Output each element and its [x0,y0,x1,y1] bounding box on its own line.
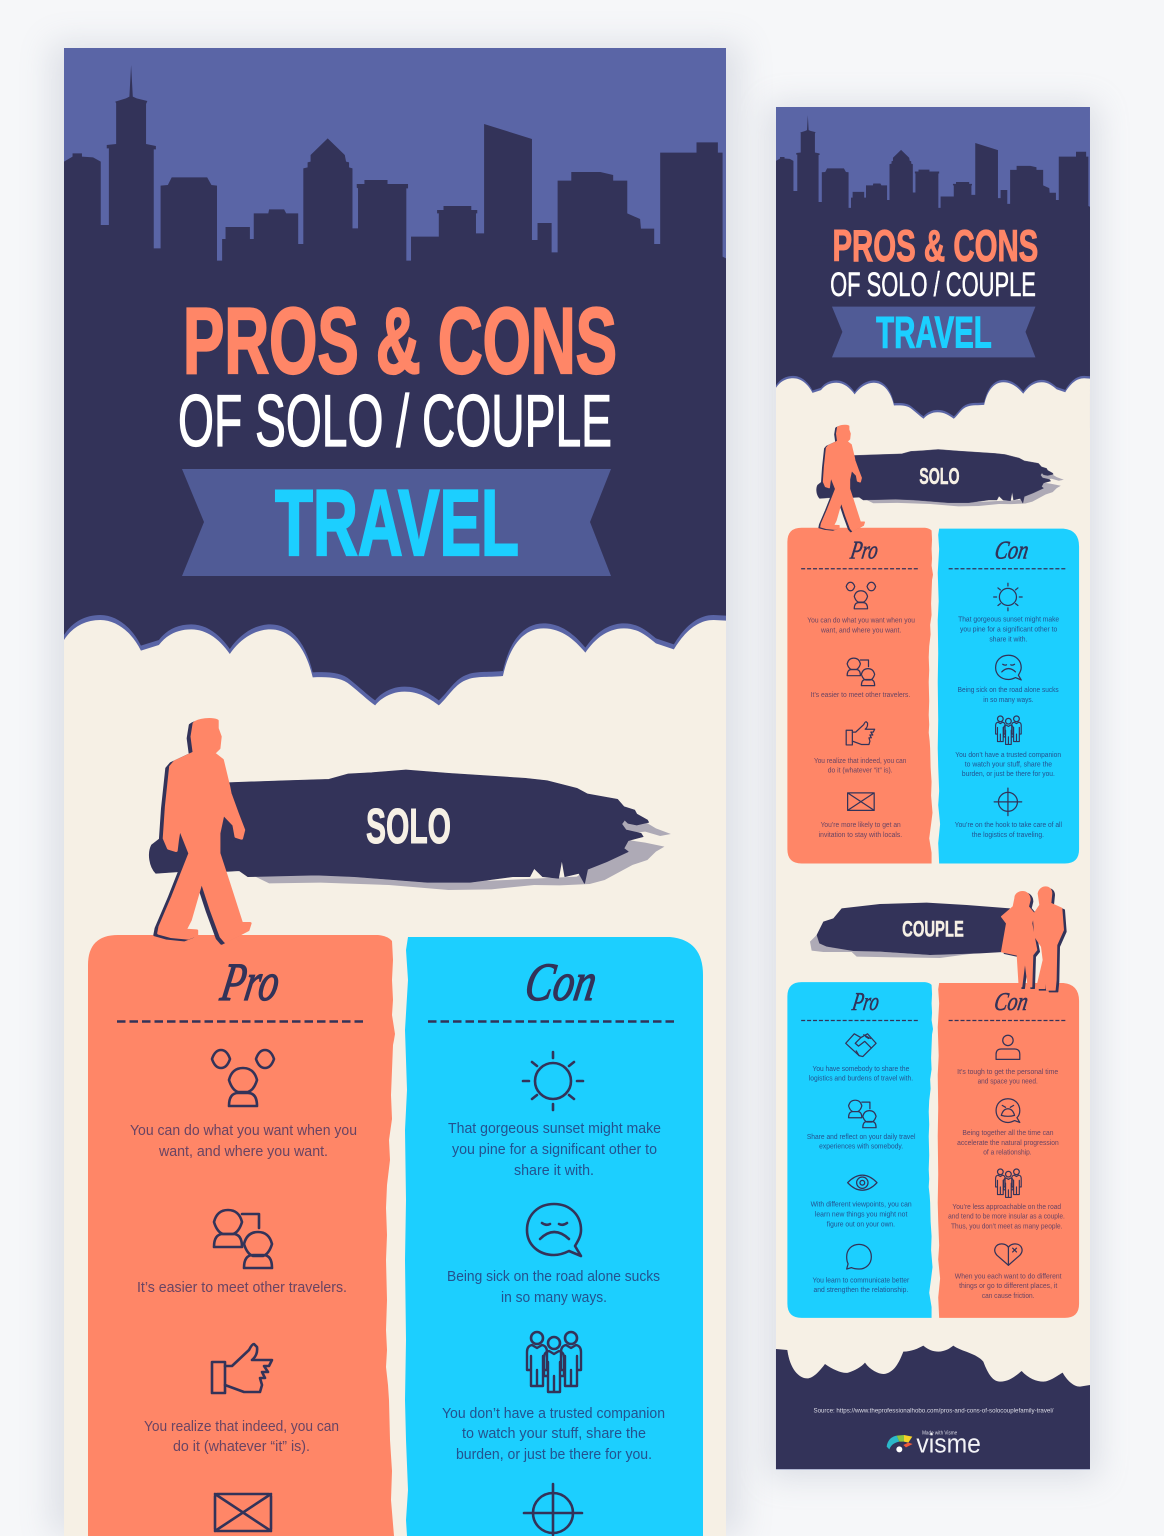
panel: couple pro: With different viewpoints, you can [811,1200,912,1208]
panel: couple pro [787,982,933,1318]
panel: solo con: You don’t have a trusted companion [442,1405,665,1422]
panel: solo pro: You’re more likely to get an [821,821,901,829]
panel: couple con: Thus, you don’t meet as many people. [951,1223,1062,1231]
panel: solo con: That gorgeous sunset might make [448,1120,661,1137]
panel: solo pro: do it (whatever “it” is). [828,766,893,774]
footer [776,1346,1090,1469]
panel: solo con: share it with. [514,1162,594,1179]
panel: couple pro: figure out on your own. [827,1220,895,1228]
panel: solo pro: do it (whatever “it” is). [173,1438,310,1455]
panel: couple con [938,983,1079,1318]
solo brush stroke and walking man: SOLO [919,463,960,489]
panel: solo pro: It’s easier to meet other travelers. [137,1279,347,1296]
panel: solo con: you pine for a significant other to [960,626,1057,634]
panel: solo con: Con [521,952,601,1012]
panel: solo pro: It’s easier to meet other travelers. [811,691,910,699]
panel: couple con: and tend to be more insular as a couple. [948,1213,1065,1221]
visme logo [887,1429,981,1459]
skyline header and cloud edge [64,48,726,790]
footer: Source: https://www.theprofessionalhobo.com/pros-and-cons-of-solocouplefamily-travel/ [813,1407,1054,1414]
panel: solo con: That gorgeous sunset might make [958,616,1059,624]
large poster [64,48,726,1536]
panel: solo pro: You can do what you want when you [807,617,915,625]
panel: couple con: can cause friction. [982,1292,1035,1300]
panel: solo pro [787,528,933,864]
panel: couple con: When you each want to do different [955,1273,1062,1281]
panel: solo con: to watch your stuff, share the [462,1425,646,1442]
panel: solo con: burden, or just be there for you. [962,770,1055,778]
panel: couple pro: Pro [850,987,882,1016]
panel: solo con: you pine for a significant other to [452,1141,657,1158]
panel: couple pro: experiences with somebody. [819,1143,903,1151]
panel: couple pro: learn new things you might not [815,1210,907,1218]
panel: solo pro: want, and where you want. [820,627,901,635]
panel: couple pro: You learn to communicate better [813,1276,910,1284]
panel: couple con: things or go to different places, it [959,1282,1057,1290]
title [178,288,617,462]
panel: couple con: and space you need. [978,1078,1038,1086]
panel: solo pro: You realize that indeed, you can [144,1418,339,1435]
panel: couple pro: Share and reflect on your daily travel [807,1133,916,1141]
panel: solo pro: Pro [216,952,284,1012]
panel: couple con: of a relationship. [983,1149,1032,1157]
poster background [776,107,1090,1469]
panel: solo con: the logistics of traveling. [972,831,1044,839]
panel: couple con: accelerate the natural progression [957,1139,1059,1147]
title: PROS & CONS [832,222,1038,271]
panel: solo pro [88,935,395,1536]
title [830,222,1038,304]
visme logo: visme [916,1429,981,1459]
panel: couple con: You’re less approachable on the road [952,1203,1061,1211]
visme logo: Made with Visme [922,1431,957,1437]
panel: solo con: Being sick on the road alone sucks [447,1268,660,1285]
panel: solo con: burden, or just be there for you. [456,1446,652,1463]
panel: couple con: Being together all the time can [962,1129,1053,1137]
small poster [776,107,1090,1469]
panel: solo pro: want, and where you want. [158,1143,328,1160]
title: OF SOLO / COUPLE [830,266,1036,304]
title: PROS & CONS [183,288,617,393]
banner: travel: TRAVEL [275,470,519,575]
panel: couple pro: and strengthen the relationship. [813,1286,908,1294]
banner: travel: TRAVEL [876,308,992,357]
panel: solo pro: invitation to stay with locals. [819,831,902,839]
panel: couple pro: logistics and burdens of travel with. [809,1075,913,1083]
title: OF SOLO / COUPLE [178,381,612,462]
panel: solo pro: Pro [848,536,881,564]
panel: solo con: You’re on the hook to take care of all [955,821,1062,829]
poster background [64,48,726,1536]
panel: couple con: It’s tough to get the personal time [957,1068,1058,1076]
panel: couple pro: You have somebody to share the [813,1065,909,1073]
panel: solo con: to watch your stuff, share the [965,760,1052,768]
icon: target [524,1484,582,1535]
panel: solo con [938,529,1079,864]
panel: solo con: Con [993,536,1031,564]
solo brush stroke and walking man [149,719,671,943]
couple brush stroke and figures: COUPLE [902,917,964,942]
panel: solo con: You don’t have a trusted companion [955,751,1061,759]
panel: solo con: in so many ways. [501,1289,607,1306]
panel: solo con: share it with. [989,636,1027,644]
solo brush stroke and walking man: SOLO [366,800,451,854]
panel: solo pro: You can do what you want when you [130,1122,357,1139]
couple brush stroke and figures [810,887,1066,992]
panel: couple con: Con [992,987,1030,1016]
panel: solo con: Being sick on the road alone sucks [958,686,1059,694]
solo brush stroke and walking man [816,425,1064,532]
skyline header and cloud edge [776,107,1090,459]
panel: solo pro: You realize that indeed, you can [814,757,906,765]
panel: solo con: in so many ways. [983,696,1034,704]
panel: solo con [405,937,703,1536]
